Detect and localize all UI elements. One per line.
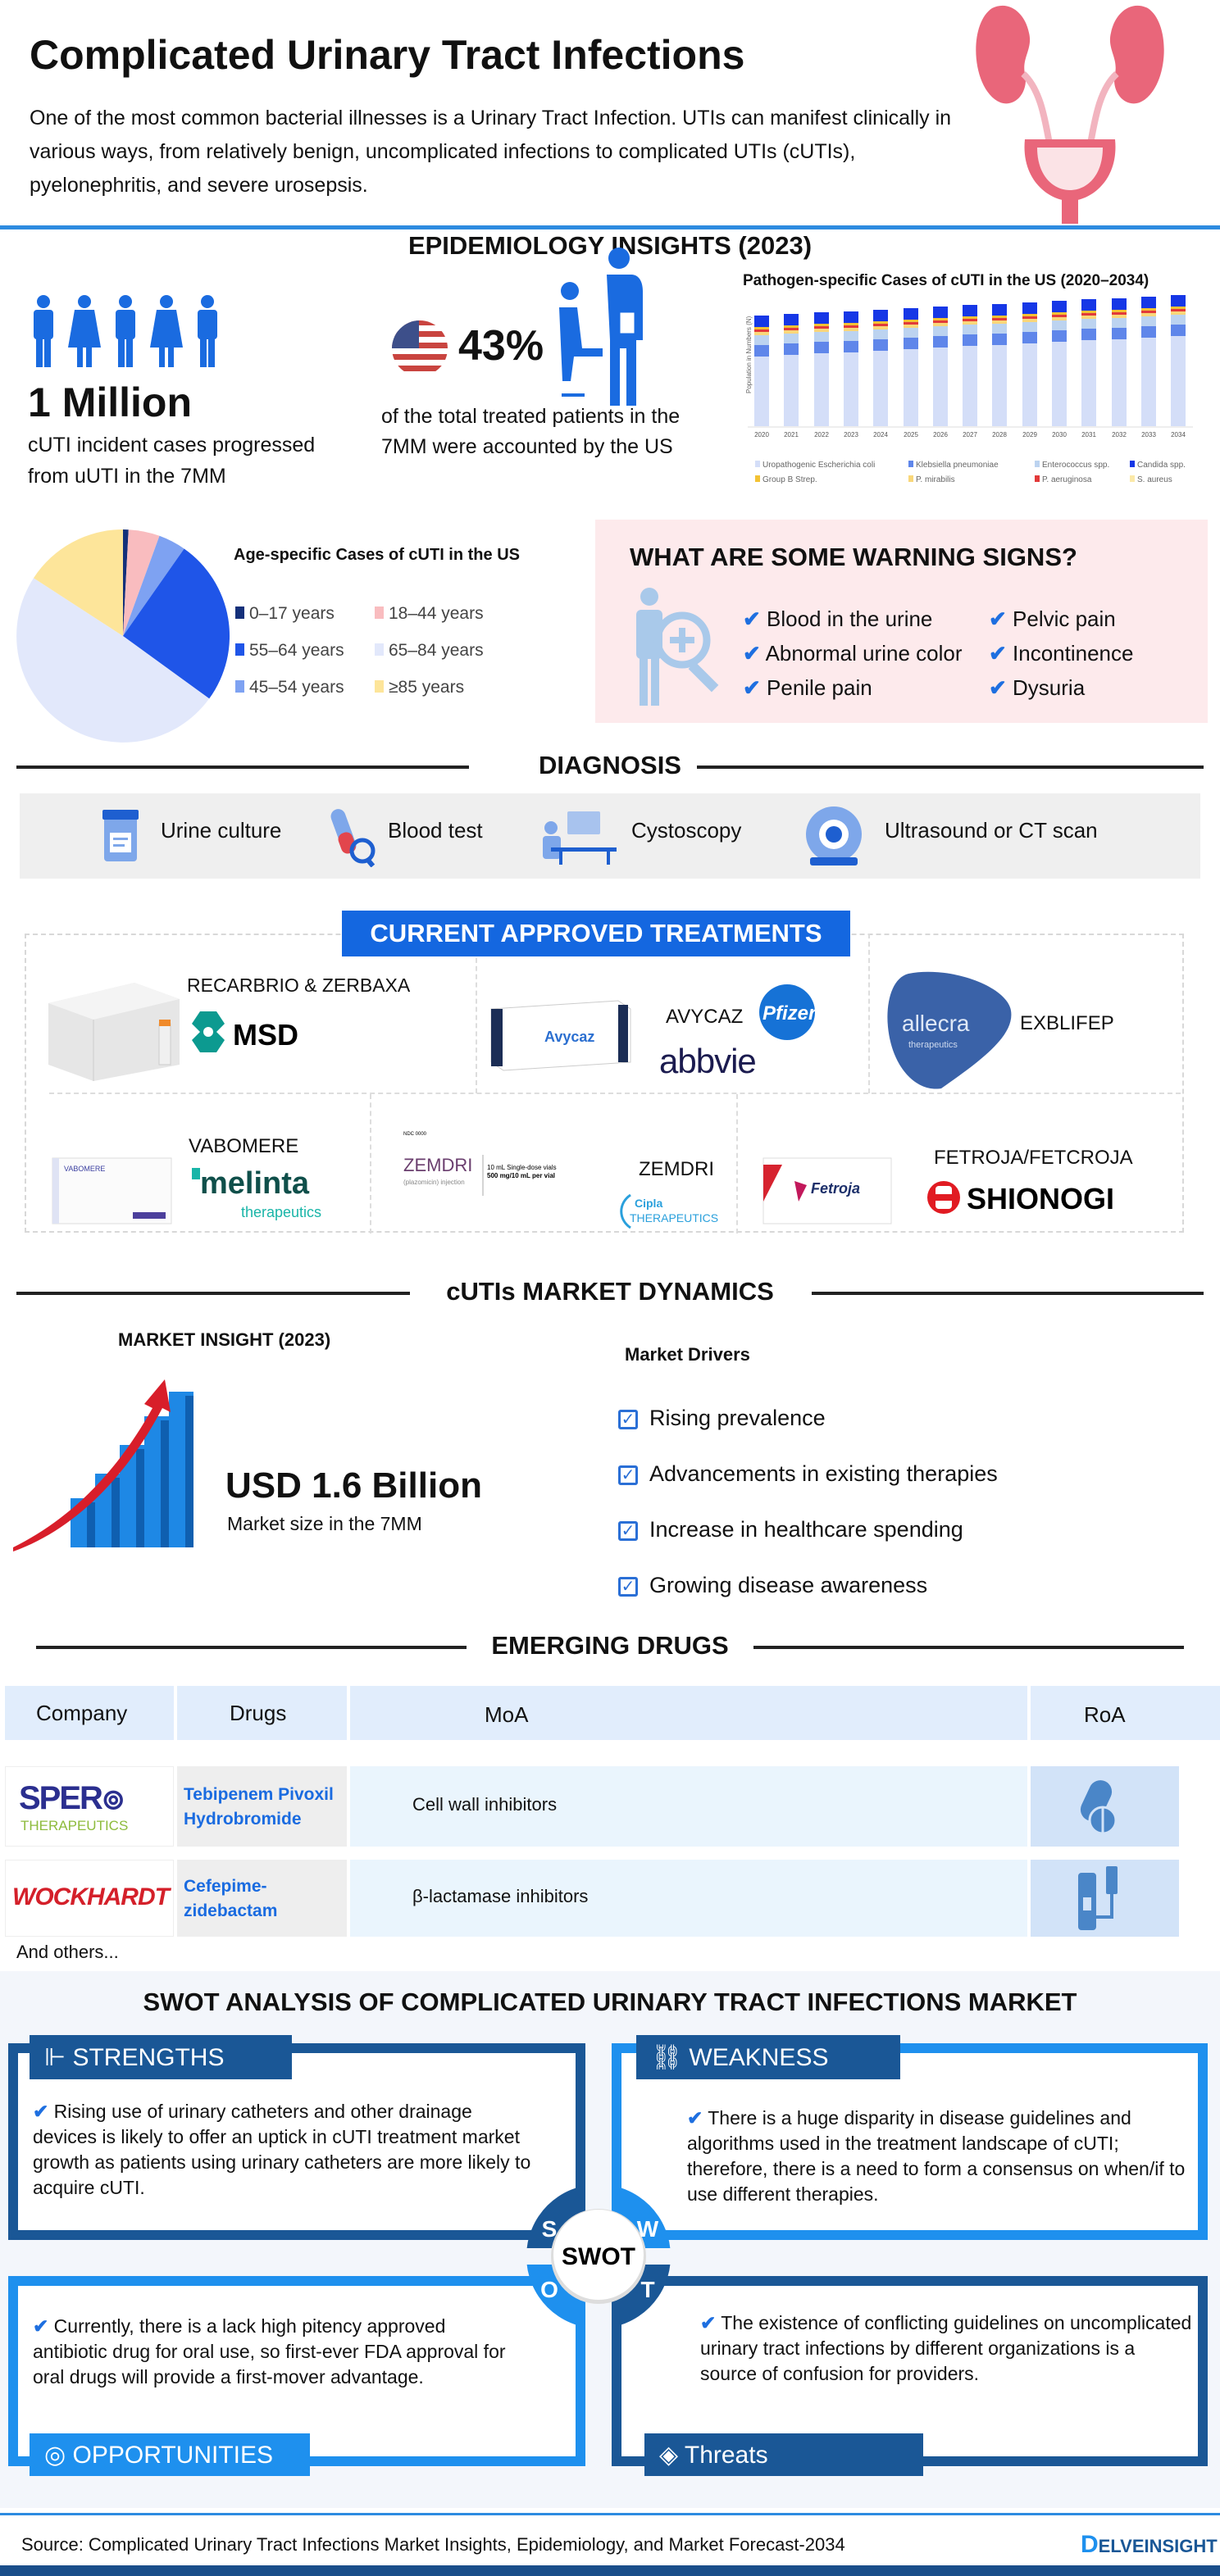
treatment: fetroja: FETROJA/FETCROJA — [934, 1147, 1133, 1169]
icon: cystoscopy — [543, 811, 617, 865]
treatment: avycaz — [490, 984, 817, 1080]
list: market drivers: ✓ — [621, 1578, 635, 1596]
swot center circle — [526, 2188, 671, 2324]
treatment: avycaz: Pfizer — [762, 1002, 817, 1024]
weakness: ✔ There is a huge disparity in disease guidelines and algorithms used in the treatment landscape of cUTI; therefore, there is a need to form a consensus on when/if to use different therapies. — [687, 2107, 1185, 2205]
treatment: zemdri: ZEMDRI — [403, 1155, 472, 1175]
table: emerging drugs — [5, 1686, 1220, 1962]
icon: US flag — [392, 320, 448, 371]
bar chart: 2032 — [1112, 431, 1127, 438]
panel: diagnosis methods: Cystoscopy — [631, 818, 741, 843]
panel: SWOT: ◈ Threats — [659, 2441, 768, 2469]
bar chart: 2020 — [754, 431, 769, 438]
table header: Company — [36, 1701, 127, 1725]
bar chart: Uropathogenic Escherichia coli — [762, 461, 875, 470]
strengths: ✔ Rising use of urinary catheters and other drainage devices is likely to offer an uptick in cUTI treatment market growth as patients using urinary catheters are more likely to acquire cUTI. — [33, 2101, 530, 2198]
treatment: exblifep — [887, 972, 1114, 1088]
logo: delveinsight: DELVEINSIGHT — [1081, 2531, 1218, 2558]
icon: doctor and patient — [559, 248, 643, 406]
treatment: recarbrio & zerbaxa: RECARBRIO & ZERBAXA — [187, 975, 410, 996]
list: signs: ✔ Penile pain — [743, 675, 872, 700]
treatment: zemdri: (plazomicin) injection — [403, 1179, 465, 1186]
swot center circle: SWOT — [562, 2243, 635, 2270]
icon: blood test — [331, 809, 376, 867]
list: market drivers: ✓ — [621, 1466, 635, 1484]
heading: market dynamics: cUTIs MARKET DYNAMICS — [446, 1277, 774, 1306]
row: wockhardt: WOCKHARDT — [12, 1883, 169, 1910]
heading: emerging drugs: EMERGING DRUGS — [491, 1631, 729, 1660]
treatment: zemdri: Cipla — [635, 1197, 662, 1210]
text: and others: And others... — [16, 1942, 119, 1962]
swot center circle: W — [637, 2216, 659, 2242]
bar chart: 2034 — [1171, 431, 1186, 438]
treatment: vabomere: melinta — [200, 1166, 309, 1201]
text: cases — [28, 434, 315, 488]
legend: age groups — [234, 546, 520, 697]
icon: IV injection — [1078, 1866, 1118, 1930]
intro text: One of the most common bacterial illnesses is a Urinary Tract Infection. UTIs can manifest clinically in various ways, from relatively benign, uncomplicated infections to complicated UTIs (cUTIs), pyelonephritis, and severe urosepsis. — [30, 107, 951, 197]
treatment: vabomere — [52, 1135, 321, 1224]
bar chart: 2027 — [963, 431, 977, 438]
row: spero — [5, 1766, 1179, 1847]
panel: market insight: Market size in the 7MM — [227, 1513, 422, 1534]
list: signs — [743, 607, 963, 700]
treatment: fetroja — [762, 1147, 1133, 1224]
legend: age groups: Age-specific Cases of cUTI in the US — [234, 546, 520, 564]
treatment: vabomere: VABOMERE — [64, 1165, 105, 1173]
row: spero: Tebipenem Pivoxil Hydrobromide — [184, 1785, 334, 1829]
panel: warning signs: ✔ Pelvic pain — [989, 607, 1116, 631]
list: signs: ✔ Abnormal urine color — [743, 641, 962, 666]
pie chart: age-specific — [16, 529, 230, 743]
heading: treatments — [342, 911, 850, 956]
swot center circle: O — [540, 2277, 558, 2302]
list: market drivers: Market Drivers — [625, 1344, 750, 1365]
row: wockhardt: zidebactam — [184, 1901, 277, 1920]
panel: warning signs: ✔ Incontinence — [989, 641, 1133, 666]
list: market drivers: ✓ — [621, 1522, 635, 1540]
panel: diagnosis methods — [20, 793, 1200, 879]
source text: Source: Complicated Urinary Tract Infections Market Insights, Epidemiology, and Market Forecast-2034 — [21, 2534, 845, 2555]
panel: current approved treatments — [25, 911, 1184, 1233]
icon: growth bars with arrow — [13, 1379, 193, 1552]
row: spero: THERAPEUTICS — [20, 1818, 128, 1833]
treatment: exblifep: allecra — [902, 1011, 970, 1036]
list: market drivers: Advancements in existing therapies — [649, 1461, 998, 1486]
panel: 43% — [381, 248, 680, 458]
bar chart: Enterococcus spp. — [1042, 461, 1109, 470]
list: market drivers: ✓ — [621, 1411, 635, 1429]
legend: age groups: 55–64 years — [249, 641, 344, 660]
stat: 1 Million: 1 Million — [28, 379, 192, 425]
treatment: avycaz: AVYCAZ — [666, 1006, 743, 1028]
icon: kidneys and bladder — [976, 5, 1164, 224]
bar chart: 2024 — [873, 431, 888, 438]
bar chart: 2023 — [844, 431, 858, 438]
treatment: recarbrio & zerbaxa — [48, 975, 410, 1081]
subheading: MARKET INSIGHT (2023) — [118, 1329, 330, 1350]
panel: warning signs: ✔ Dysuria — [989, 675, 1085, 700]
title: Complicated Urinary Tract Infections — [30, 32, 744, 78]
legend: age groups: 0–17 years — [249, 604, 335, 623]
opportunities — [8, 2276, 585, 2466]
stat: 43%: 43% — [458, 322, 544, 370]
bar chart: Klebsiella pneumoniae — [916, 461, 999, 470]
icon: oral pills — [1081, 1780, 1115, 1833]
weakness — [612, 2043, 1208, 2240]
row: spero: Cell wall inhibitors — [412, 1794, 557, 1815]
chart: pathogen-specific cases — [743, 272, 1193, 484]
list: signs: ✔ Blood in the urine — [743, 607, 932, 631]
table header — [5, 1686, 1220, 1740]
row: wockhardt: Cefepime- — [184, 1877, 267, 1896]
bar chart: P. mirabilis — [916, 475, 955, 484]
treatment: vabomere: therapeutics — [241, 1204, 321, 1220]
footer — [0, 2513, 1220, 2576]
bar chart: 2026 — [933, 431, 948, 438]
panel: diagnosis methods: Ultrasound or CT scan — [885, 818, 1098, 843]
panel: 1 million — [28, 295, 315, 488]
treatment: exblifep: therapeutics — [908, 1040, 958, 1050]
heading: diagnosis: DIAGNOSIS — [539, 751, 681, 779]
text: cases: cUTI incident cases progressed — [28, 434, 315, 457]
swot center circle: S — [542, 2216, 557, 2242]
heading: WHAT ARE SOME WARNING SIGNS? — [630, 543, 1077, 571]
threats — [612, 2276, 1208, 2466]
bar chart: 2030 — [1052, 431, 1067, 438]
treatment: fetroja: Fetroja — [811, 1180, 860, 1197]
row: wockhardt: β-lactamase inhibitors — [412, 1886, 588, 1906]
treatment: fetroja: SHIONOGI — [967, 1182, 1114, 1215]
text: cases: from uUTI in the 7MM — [28, 465, 226, 488]
treatment: zemdri: 500 mg/10 mL per vial — [487, 1172, 555, 1179]
list: market drivers: Increase in healthcare spending — [649, 1517, 963, 1542]
strengths — [8, 2043, 585, 2240]
bar chart: S. aureus — [1137, 475, 1172, 484]
stat: market size: USD 1.6 Billion — [225, 1465, 482, 1506]
icon: urine culture — [102, 810, 139, 861]
panel: SWOT: ◎ OPPORTUNITIES — [44, 2441, 273, 2469]
treatment: exblifep: EXBLIFEP — [1020, 1012, 1114, 1034]
treatment: zemdri: 10 mL Single-dose vials — [487, 1164, 557, 1171]
legend: age groups: 18–44 years — [389, 604, 484, 623]
bar chart: Population in Numbers (N) — [745, 316, 753, 393]
treatment: zemdri: NDC 0000 — [403, 1132, 427, 1137]
text: 43% caption — [381, 405, 680, 458]
panel: diagnosis methods: Urine culture — [161, 818, 281, 843]
treatment: zemdri: THERAPEUTICS — [630, 1211, 718, 1224]
heading: swot: SWOT ANALYSIS OF COMPLICATED URINARY TRACT INFECTIONS MARKET — [143, 1988, 1077, 2016]
list: market drivers — [618, 1344, 998, 1597]
opportunities: ✔ Currently, there is a lack high pitency approved antibiotic drug for oral use, so first-ever FDA approval for oral drugs will provide a first-mover advantage. — [33, 2315, 506, 2387]
row: spero: SPER⊚ — [19, 1780, 123, 1816]
panel: SWOT: ⛓ WEAKNESS — [651, 2044, 828, 2070]
panel: diagnosis methods: Blood test — [388, 818, 483, 843]
bar chart: 2031 — [1081, 431, 1096, 438]
swot center circle: T — [640, 2277, 655, 2302]
icon: ultrasound / ct — [806, 806, 862, 865]
icon: person with magnifier — [636, 588, 718, 706]
bar chart — [745, 295, 1193, 484]
bar chart: 2022 — [814, 431, 829, 438]
text: 43% caption: of the total treated patients in the — [381, 405, 680, 428]
treatment: vabomere: VABOMERE — [189, 1135, 298, 1157]
table header: Drugs — [230, 1701, 286, 1725]
treatment: zemdri: ZEMDRI — [639, 1158, 714, 1180]
heading: diagnosis — [16, 751, 1204, 779]
threats: ✔ The existence of conflicting guidelines on uncomplicated urinary tract infections by different organizations is a source of confusion for providers. — [700, 2312, 1191, 2384]
list: market drivers: Growing disease awareness — [649, 1573, 927, 1597]
text: 43% caption: 7MM were accounted by the US — [381, 435, 673, 458]
heading: emerging drugs — [36, 1631, 1184, 1660]
legend: age groups: ≥85 years — [389, 678, 464, 697]
bar chart: P. aeruginosa — [1042, 475, 1092, 484]
heading: market dynamics — [16, 1277, 1204, 1306]
bar chart: Candida spp. — [1137, 461, 1186, 470]
bar chart: 2025 — [904, 431, 918, 438]
panel: SWOT: ⊩ STRENGTHS — [44, 2044, 224, 2070]
legend: age groups: 45–54 years — [249, 678, 344, 697]
treatment: zemdri — [403, 1131, 718, 1229]
heading: epidemiology: EPIDEMIOLOGY INSIGHTS (2023) — [408, 231, 812, 260]
bar chart: 2033 — [1141, 431, 1156, 438]
bar chart: 2028 — [992, 431, 1007, 438]
table header: MoA — [485, 1702, 528, 1727]
bar chart: Group B Strep. — [762, 475, 817, 484]
heading: treatments: CURRENT APPROVED TREATMENTS — [370, 919, 822, 947]
bar chart: 2021 — [784, 431, 799, 438]
panel: warning signs — [595, 520, 1208, 723]
bar chart: 2029 — [1022, 431, 1037, 438]
panel: SWOT — [0, 1971, 1220, 2508]
treatment: avycaz: abbvie — [659, 1042, 756, 1080]
divider blue — [0, 225, 1220, 229]
legend: age groups: 65–84 years — [389, 641, 484, 660]
chart title: Pathogen-specific Cases of cUTI in the US (2020–2034) — [743, 272, 1149, 289]
treatment: avycaz: Avycaz — [544, 1029, 594, 1045]
list: market drivers: Rising prevalence — [649, 1406, 826, 1430]
panel: market insight — [13, 1329, 482, 1552]
table header: RoA — [1084, 1702, 1126, 1727]
row: wockhardt — [5, 1860, 1179, 1937]
icon: people — [34, 295, 217, 367]
treatment: recarbrio & zerbaxa: MSD — [233, 1018, 298, 1052]
